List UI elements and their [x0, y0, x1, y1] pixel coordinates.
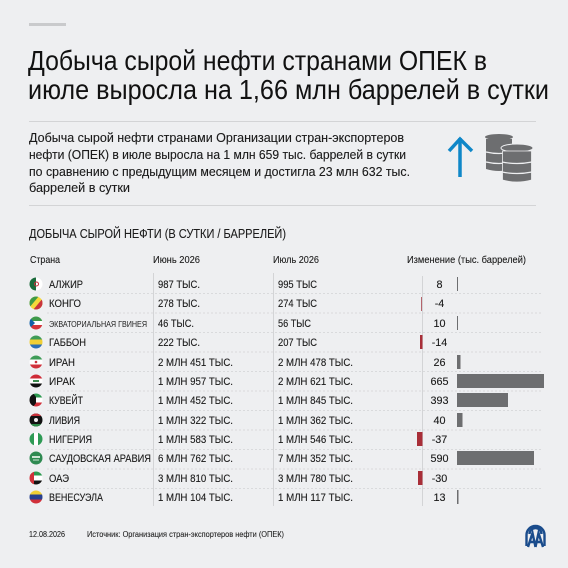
row: Congo: 274 ТЫС: [278, 298, 317, 310]
text block: summary: баррелей в сутки: [29, 180, 130, 195]
row: Iran: 26: [433, 357, 446, 369]
row: UAE: ОАЭ: [49, 473, 69, 485]
row: Iraq: 1 МЛН 957 ТЫС.: [158, 376, 233, 388]
row: Nigeria: [29, 432, 447, 446]
row: Nigeria: НИГЕРИЯ: [49, 434, 92, 446]
text block: summary: Добыча сырой нефти странами Организации стран-экспортеров: [29, 130, 404, 145]
row: Libya: 1 МЛН 322 ТЫС.: [158, 415, 233, 427]
icon: up arrow: [449, 138, 472, 177]
row: Congo: 278 ТЫС.: [158, 298, 200, 310]
row: Libya: ЛИВИЯ: [49, 415, 80, 427]
table header: Июль 2026: [273, 255, 319, 266]
row: Congo: КОНГО: [49, 298, 81, 310]
row: Iraq: [29, 374, 544, 388]
row: Equatorial Guinea: [29, 316, 458, 330]
row: Saudi Arabia: 6 МЛН 762 ТЫС.: [158, 453, 233, 465]
footer source: Источник: Организация стран-экспортеров нефти (ОПЕК): [87, 529, 284, 539]
icon: AA logo: [526, 526, 544, 547]
row: UAE: [29, 471, 447, 486]
row: Kuwait: [29, 393, 508, 408]
row: Kuwait: КУВЕЙТ: [49, 394, 83, 407]
row: Iran: 2 МЛН 478 ТЫС.: [278, 357, 353, 369]
row: Equatorial Guinea: ЭКВАТОРИАЛЬНАЯ ГВИНЕЯ: [49, 320, 147, 329]
row: Venezuela: ВЕНЕСУЭЛА: [49, 492, 104, 504]
row: Iran: [29, 355, 460, 370]
row: Gabon: [29, 335, 447, 350]
row: Saudi Arabia: 7 МЛН 352 ТЫС.: [278, 453, 353, 465]
title: [28, 45, 549, 105]
row: Venezuela: 1 МЛН 117 ТЫС.: [278, 492, 353, 504]
text block: summary: по сравнению с предыдущим месяцем и достигла 23 млн 632 тыс.: [29, 164, 410, 179]
row: UAE: 3 МЛН 810 ТЫС.: [158, 473, 233, 485]
row: Kuwait: 1 МЛН 845 ТЫС.: [278, 395, 353, 407]
row: Saudi Arabia: [29, 451, 534, 465]
row: Algeria: АЛЖИР: [49, 279, 83, 291]
row: Equatorial Guinea: 46 ТЫС.: [158, 318, 194, 330]
row: Equatorial Guinea: 56 ТЫС: [278, 318, 311, 330]
text block: summary: [29, 130, 410, 195]
text block: summary: нефти (ОПЕК) в июле выросла на 1 млн 659 тыс. баррелей в сутки: [29, 147, 406, 162]
row: Venezuela: 13: [433, 492, 446, 504]
row: Algeria: 8: [436, 279, 443, 291]
row: Kuwait: 393: [430, 395, 449, 407]
row: Venezuela: 1 МЛН 104 ТЫС.: [158, 492, 233, 504]
row: Venezuela: [29, 490, 458, 504]
row: Gabon: 207 ТЫС: [278, 337, 317, 349]
row: UAE: -30: [432, 473, 447, 485]
table header: Изменение (тыс. баррелей): [407, 254, 526, 266]
row: Algeria: 995 ТЫС: [278, 279, 317, 291]
row: Saudi Arabia: 590: [430, 453, 449, 465]
row: UAE: 3 МЛН 780 ТЫС.: [278, 473, 353, 485]
row: Congo: -4: [435, 298, 444, 310]
footer date: 12.08.2026: [29, 529, 65, 539]
row: Kuwait: 1 МЛН 452 ТЫС.: [158, 395, 233, 407]
row: Libya: [29, 413, 462, 427]
row: Iraq: ИРАК: [49, 376, 76, 388]
row: Nigeria: 1 МЛН 546 ТЫС.: [278, 434, 353, 446]
icon: oil barrels: [485, 134, 533, 182]
row: Libya: 1 МЛН 362 ТЫС.: [278, 415, 353, 427]
row: Iran: ИРАН: [49, 357, 75, 369]
table header: [30, 254, 526, 266]
row: Nigeria: 1 МЛН 583 ТЫС.: [158, 434, 233, 446]
table header: Июнь 2026: [153, 255, 200, 266]
row: Libya: 40: [433, 415, 446, 427]
row: Algeria: 987 ТЫС.: [158, 279, 200, 291]
title: Добыча сырой нефти странами ОПЕК в: [28, 45, 487, 76]
row: Algeria: [29, 277, 458, 291]
row: Congo: [29, 296, 444, 311]
row: Gabon: 222 ТЫС.: [158, 337, 200, 349]
row: Saudi Arabia: САУДОВСКАЯ АРАВИЯ: [49, 453, 151, 465]
table header: Страна: [30, 255, 60, 266]
row: Gabon: -14: [432, 337, 447, 349]
row: Nigeria: -37: [432, 434, 447, 446]
row: Iran: 2 МЛН 451 ТЫС.: [158, 357, 233, 369]
heading: table: ДОБЫЧА СЫРОЙ НЕФТИ (В СУТКИ / БАРРЕЛЕЙ): [29, 226, 286, 241]
row: Gabon: ГАББОН: [49, 337, 86, 349]
row: Iraq: 665: [430, 376, 449, 388]
row: Iraq: 2 МЛН 621 ТЫС.: [278, 376, 353, 388]
row: Equatorial Guinea: 10: [433, 318, 446, 330]
